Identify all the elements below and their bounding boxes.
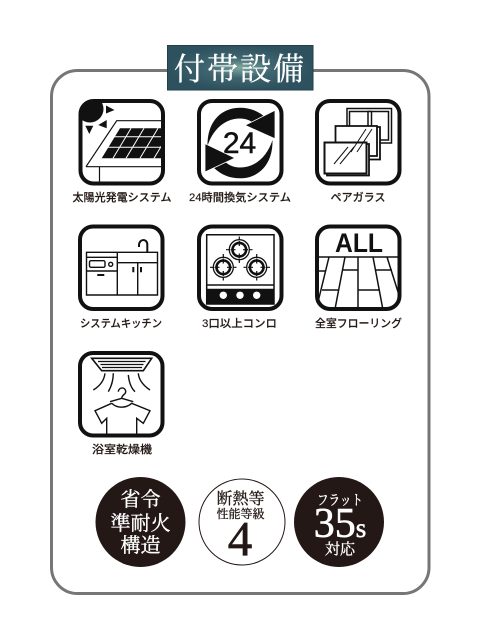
label: kitchen: システムキッチン [80, 317, 162, 330]
badge: flat 35s [294, 477, 384, 567]
icon: 24 hour ventilation [199, 101, 282, 184]
label: ventilation: 24時間換気システム [189, 190, 291, 204]
label: bathroom dryer: 浴室乾燥機 [92, 442, 152, 456]
icon: all flooring [316, 226, 401, 310]
badge: insulation grade 4: 断熱等 [216, 490, 265, 508]
badge: quasi fire resistant: 構造 [120, 534, 160, 557]
panel: equipment frame [52, 70, 429, 594]
badge: flat 35s: フラット [317, 494, 363, 509]
badge: quasi fire resistant: 省令 [120, 488, 160, 511]
label: flooring: 全室フローリング [315, 316, 402, 330]
icon: bathroom dryer [80, 353, 162, 437]
icon: 24 hour ventilation: 24 [223, 127, 256, 160]
badge: quasi fire resistant [96, 477, 186, 567]
badge: flat 35s: 35s [314, 501, 366, 547]
icon: all flooring: ALL [335, 228, 383, 258]
label: solar: 太陽光発電システム [72, 190, 172, 204]
title: 付帯設備: 付帯設備 [174, 52, 304, 87]
badge: quasi fire resistant: 準耐火 [110, 512, 170, 535]
badge: flat 35s: 対応 [325, 541, 356, 558]
badge: insulation grade 4: 性能等級 [216, 506, 265, 521]
icon: 3 burner stove [199, 226, 282, 309]
label: stove: 3口以上コンロ [202, 317, 277, 330]
icon: solar power system [78, 99, 165, 186]
badge: insulation grade 4: 4 [228, 511, 252, 566]
label: double glass: ペアガラス [330, 191, 386, 204]
icon: system kitchen [80, 226, 162, 309]
icon: double glass [317, 101, 400, 184]
badge: insulation grade 4 [199, 479, 285, 566]
